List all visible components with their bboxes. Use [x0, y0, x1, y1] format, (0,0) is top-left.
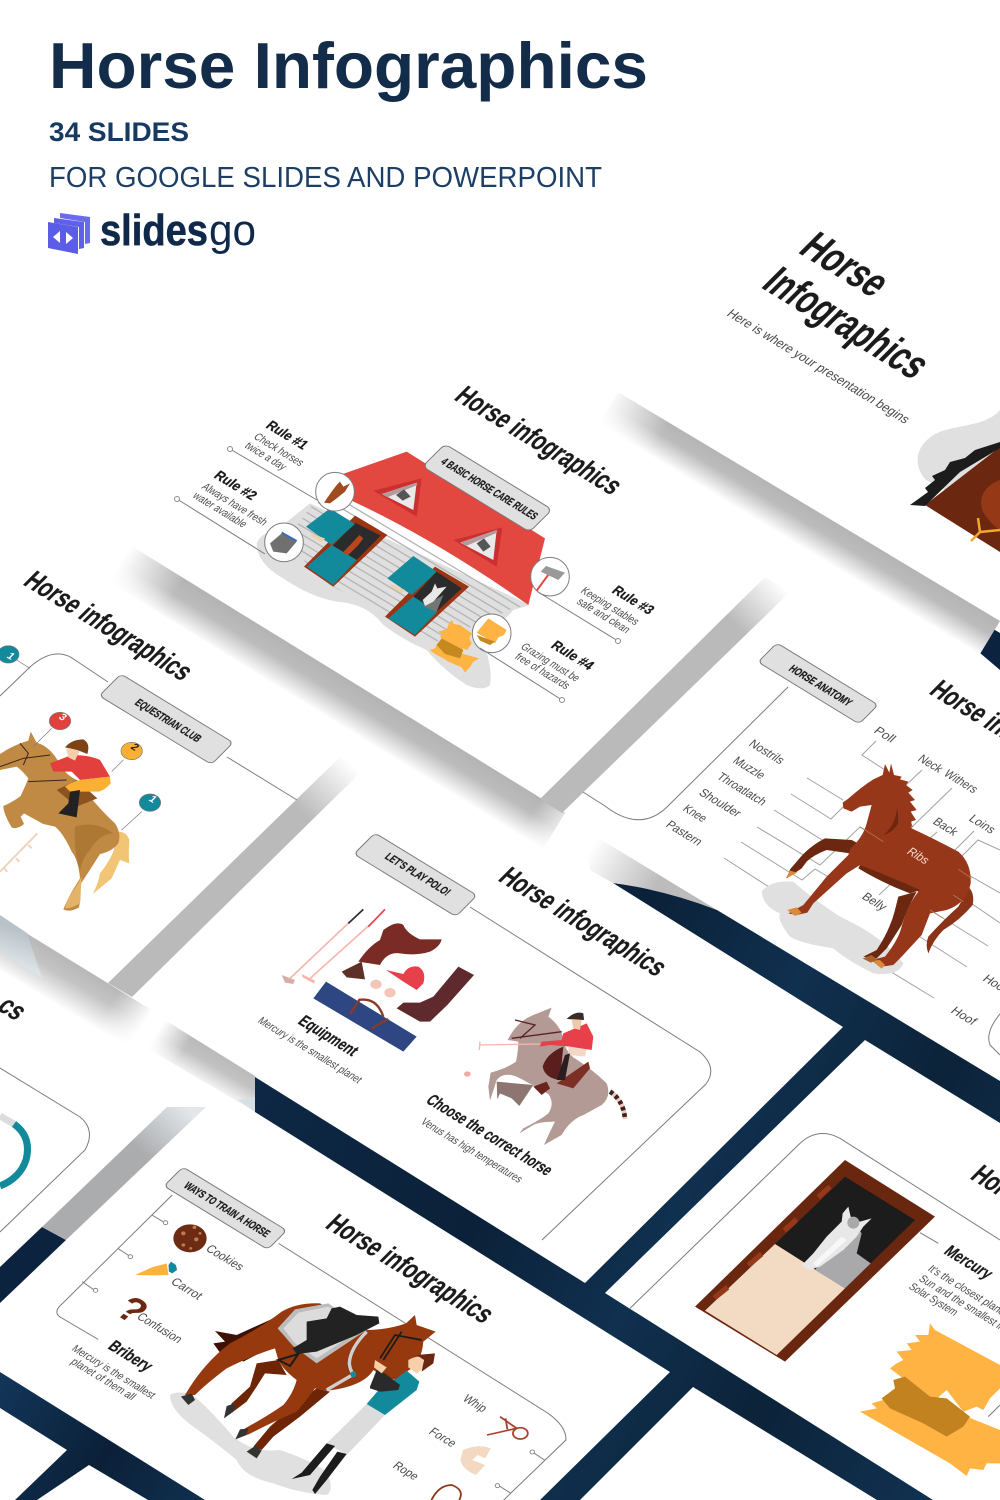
rule 2 text: Rule #2: [210, 469, 260, 503]
anatomy leader lines: [724, 741, 1000, 998]
anatomy labels: Withers: [941, 767, 981, 796]
jump fence: [0, 833, 37, 872]
polo balls: [370, 980, 396, 997]
slidesgo logo: [48, 206, 256, 255]
icon: horse: [324, 482, 350, 503]
rule 4 text: Grazing must be: [518, 642, 582, 684]
saddle: [57, 780, 97, 807]
rule 1 text: [242, 419, 311, 473]
pin numbers: 1: [4, 651, 17, 662]
rider: [50, 739, 111, 817]
pin numbers: 1: [146, 794, 159, 805]
saddle pad: [278, 1303, 367, 1363]
body shading: [858, 807, 920, 893]
ground shadow: [170, 1392, 331, 1495]
slide border: [470, 907, 711, 1240]
saddle: [533, 1047, 590, 1095]
reins: [0, 743, 67, 782]
horse caption: [418, 1091, 558, 1185]
tag: equestrian club: EQUESTRIAN CLUB: [132, 698, 204, 745]
rule 1 text: Rule #1: [262, 419, 311, 453]
rule 2 text: water available: [189, 490, 249, 530]
equipment illustration: [282, 909, 474, 1052]
stable door left: [304, 508, 387, 587]
far leg: [497, 1082, 533, 1106]
logo wordmark slides: slides: [100, 206, 208, 255]
pins: [0, 646, 161, 830]
icon: bucket: [270, 533, 297, 553]
stable door right: [385, 556, 469, 637]
anatomy labels: Poll: [871, 724, 899, 745]
tag: ways to train: WAYS TO TRAIN A HORSE: [181, 1181, 272, 1240]
anatomy labels: Hoof: [948, 1004, 980, 1028]
tag: equestrian club: [99, 674, 233, 764]
item labels: Cookies: [203, 1242, 247, 1273]
polo mallets: [290, 909, 385, 980]
stable illustration: [257, 452, 569, 707]
hooves: [786, 871, 885, 969]
slide border: [0, 654, 297, 800]
horse head: [802, 1207, 872, 1270]
bribery caption: planet of them all: [68, 1357, 138, 1403]
anatomy labels: Pastern: [663, 818, 706, 848]
saddle: [358, 923, 442, 965]
jumping horse illustration: [0, 646, 161, 911]
hooves: [181, 1393, 262, 1458]
icon: rope: [431, 1485, 461, 1500]
navy gaps between slides: [0, 627, 1000, 1500]
anatomy labels: Knee: [680, 802, 710, 825]
tail rings: [610, 1092, 625, 1119]
tail: [93, 832, 129, 894]
equipment caption: Mercury is the smallest planet: [255, 1016, 365, 1086]
item labels: Force: [426, 1425, 460, 1450]
far legs: [787, 838, 917, 958]
rule 4 text: free of hazards: [512, 652, 572, 692]
horse neck: [815, 1227, 871, 1288]
rule 3 text: Rule #3: [608, 584, 657, 618]
bribery caption: [68, 1337, 158, 1403]
slide shadows: [0, 372, 1000, 1240]
tag: polo: LET'S PLAY POLO!: [382, 852, 453, 898]
tag: ways to train: [164, 1167, 287, 1249]
anatomy labels: Throatlatch: [714, 770, 770, 808]
slide heading: Horse: [790, 224, 900, 305]
bribery caption: Bribery: [104, 1337, 158, 1375]
anatomy labels: Nostrils: [746, 737, 788, 767]
anatomy labels: [663, 724, 1000, 1028]
polo helmet: [386, 966, 424, 990]
stable door illustration: [695, 1160, 935, 1362]
icon: horseshoe force: [460, 1446, 491, 1475]
tail: [927, 887, 973, 953]
breast strap: [327, 1332, 367, 1390]
rule 2 text: Always have fresh: [199, 482, 270, 528]
tag: polo: [354, 833, 477, 916]
horse body: [185, 1303, 436, 1435]
bribery caption: Mercury is the smallest: [69, 1344, 158, 1401]
panel: mercury slide: [630, 1134, 1000, 1476]
stirrup: [278, 1354, 298, 1366]
slide heading: Horse infographics: [448, 381, 629, 500]
slide border: [630, 1134, 1000, 1417]
item labels: Rope: [390, 1459, 422, 1483]
rule 3 text: safe and clean: [574, 597, 632, 636]
anatomy labels: Belly: [859, 890, 891, 913]
icon: cookie: [173, 1224, 207, 1252]
logo icon: [48, 213, 90, 254]
tag: care rules: 4 BASIC HORSE CARE RULES: [438, 457, 540, 522]
slide subtitle: Here is where your presentation begins: [724, 307, 913, 426]
logo wordmark go: go: [209, 206, 256, 255]
panel: title slide: [724, 224, 1000, 552]
far legs: [225, 1360, 330, 1450]
panel: horse anatomy slide: [583, 643, 1000, 1055]
rule icon circles: [265, 472, 569, 653]
horse: [488, 1008, 608, 1145]
dormer windows: [373, 478, 502, 567]
donut arc: [0, 1124, 28, 1186]
icon: question mark: ?: [107, 1289, 157, 1332]
horse head illustration: [910, 410, 1000, 552]
bridle: [380, 1332, 422, 1360]
rider: [540, 1013, 593, 1080]
horse body: [788, 763, 971, 967]
ball: [464, 1071, 471, 1077]
item labels: Whip: [460, 1392, 490, 1415]
horse body: [0, 732, 119, 911]
tag: horse anatomy: [758, 643, 878, 724]
slide count: 34 SLIDES: [49, 117, 189, 147]
mane: [894, 775, 917, 828]
item labels: Confusion: [134, 1310, 186, 1346]
horse illustration: [762, 763, 973, 974]
slide border: [0, 1068, 89, 1232]
donut ring: [0, 1116, 14, 1124]
item labels: [134, 1242, 490, 1483]
anatomy labels: Shoulder: [696, 786, 744, 820]
anatomy labels: Back: [930, 815, 962, 838]
hay bales and hay icon: [429, 618, 507, 673]
slide heading: Horse infographics: [17, 566, 200, 686]
reins: [512, 1020, 562, 1038]
riding boot: [397, 967, 474, 1022]
tail: [213, 1318, 273, 1362]
horse caption: Venus has high temperatures: [418, 1117, 525, 1185]
page title: Horse Infographics: [49, 29, 648, 102]
icon: whip: [487, 1417, 528, 1439]
horse shading: [75, 824, 113, 870]
anatomy labels: Neck: [915, 752, 947, 775]
subtitle: FOR GOOGLE SLIDES AND POWERPOINT: [49, 162, 602, 194]
rule 1 text: Check horses: [251, 432, 306, 469]
slide border corner: [989, 1014, 1000, 1055]
handler: [292, 1353, 435, 1494]
pin numbers: 2: [128, 742, 141, 753]
anatomy labels: Ribs: [904, 845, 933, 867]
equipment caption: Equipment: [294, 1012, 363, 1059]
slide border: [583, 687, 788, 820]
lines over the body: [860, 827, 972, 918]
pin numbers: 3: [56, 712, 69, 723]
equipment bag: [313, 982, 417, 1052]
slide heading: Horse infographics: [319, 1209, 501, 1329]
equipment caption: [255, 1012, 365, 1086]
leader lines: [174, 446, 620, 702]
lower leg highlight: [65, 877, 82, 908]
slide heading: [753, 224, 940, 387]
slide heading: Horse infographics: [492, 862, 674, 982]
panel: third left slide fragment: [0, 991, 89, 1232]
mercury text: Solar System: [906, 1282, 960, 1318]
ground shadow: [762, 881, 903, 974]
rule 1 text: twice a day: [242, 441, 289, 473]
rule 2 text: [189, 469, 270, 530]
anatomy labels: Muzzle: [730, 754, 769, 782]
hay bale illustration: [860, 1323, 1000, 1476]
polo mallet: [479, 1042, 540, 1050]
tag: care rules: [423, 444, 552, 532]
tag: horse anatomy: HORSE ANATOMY: [786, 664, 854, 709]
panel: polo slide: [255, 833, 711, 1240]
roof: [340, 452, 545, 605]
frame highlights: [713, 1185, 832, 1300]
panel: equestrian club slide: [0, 566, 297, 911]
mercury text: [906, 1242, 1000, 1333]
polo horse illustration: [464, 1008, 625, 1145]
icon: rake: [537, 566, 565, 591]
saddle: [293, 1307, 379, 1354]
panel: training slide: [57, 1167, 566, 1500]
panel: horse care rules slide: [174, 381, 657, 707]
training illustration: [170, 1303, 436, 1495]
pin numbers: [4, 651, 159, 805]
rule 3 text: Keeping stables: [578, 586, 641, 628]
slide border: [57, 1195, 566, 1500]
rule 4 text: Rule #4: [547, 639, 597, 673]
ground shadow and wall: [257, 503, 530, 688]
item labels: Carrot: [168, 1275, 206, 1302]
horse caption: Choose the correct horse: [422, 1091, 558, 1179]
icon: carrot: [135, 1262, 177, 1275]
